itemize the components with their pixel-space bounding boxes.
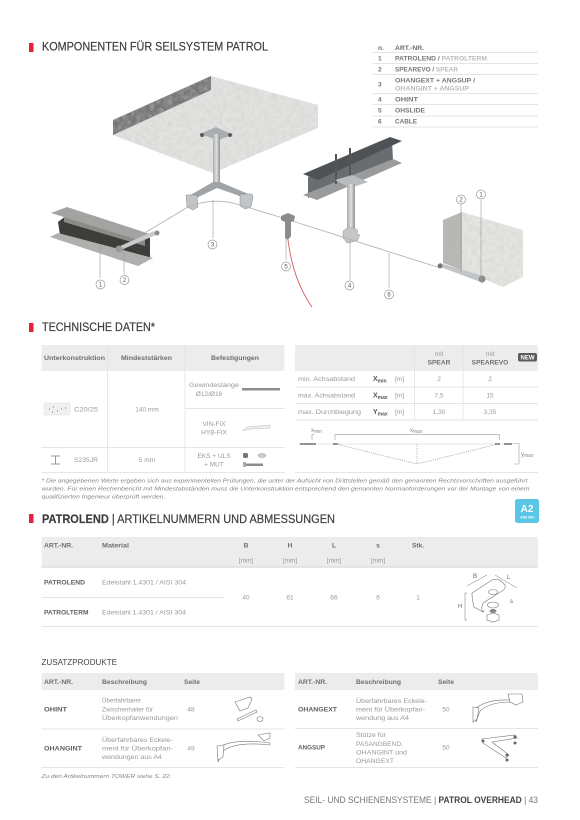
table: article list: OHSLIDE bbox=[395, 108, 426, 114]
table: accessories left: OHANGINT bbox=[44, 746, 82, 752]
table: accessories right: Stütze für bbox=[356, 732, 387, 739]
table: spacing values: mit bbox=[435, 351, 444, 358]
badge: A2 AISI 304 bbox=[515, 499, 539, 523]
table: spacing values: min bbox=[378, 378, 387, 384]
table: accessories left: Zwischenhalter für bbox=[102, 706, 154, 714]
diagram: cable deflection: max bbox=[413, 429, 423, 435]
icon: steel profile bbox=[51, 456, 60, 464]
table: article list: n. bbox=[378, 45, 384, 52]
table: accessories left: Überkopfanwendungen bbox=[102, 714, 178, 722]
table: accessories right: OHANGEXT bbox=[356, 758, 394, 765]
icon: OHANGINT bbox=[217, 733, 270, 762]
table: spacing values bbox=[295, 345, 538, 472]
table: spacing values: X bbox=[373, 376, 378, 383]
table: accessories right: OHANGINT und bbox=[356, 750, 407, 756]
table: article numbers and dimensions: Material bbox=[102, 542, 129, 550]
table: accessories left: Beschreibung bbox=[102, 679, 147, 686]
table: spacing values: 1,30 bbox=[433, 409, 446, 416]
table: article list: 3 bbox=[378, 82, 382, 88]
callout numbers: 4 bbox=[348, 284, 352, 290]
table: article numbers and dimensions: s bbox=[376, 542, 380, 550]
table: accessories right bbox=[295, 673, 538, 768]
table: article list: 6 bbox=[378, 118, 382, 126]
icon: fastener set bbox=[243, 453, 266, 467]
left end bracket bbox=[116, 230, 160, 252]
table: substructure and fastening: Mindeststärken bbox=[121, 355, 172, 362]
table: accessories right: wendung aus A4 bbox=[355, 715, 409, 722]
icon: ANGSUP bbox=[482, 735, 517, 762]
table: spacing values: max. Durchbiegung bbox=[298, 409, 361, 416]
heading: Patrolend: PATROLEND | ARTIKELNUMMERN UND ABMESSUNGEN bbox=[42, 514, 335, 526]
table: article numbers and dimensions: PATROLEND bbox=[44, 580, 85, 586]
icon: threaded rod bbox=[242, 388, 280, 390]
table: article list: PATROLEND / PATROLTERM bbox=[395, 56, 488, 62]
table: spacing values: [m] bbox=[395, 409, 404, 416]
table: article list: SPEAREVO / SPEAR bbox=[395, 66, 458, 74]
icon: concrete bbox=[44, 403, 70, 415]
table: article list bbox=[373, 45, 538, 127]
table: spacing values: 2 bbox=[437, 376, 441, 383]
table: article list: 1 bbox=[378, 56, 382, 62]
table: article list: OHANGEXT + ANGSUP / bbox=[395, 78, 475, 84]
table: accessories right: Seite bbox=[438, 679, 454, 686]
drawing: end bracket dimensions bbox=[458, 574, 517, 622]
wall concrete block bbox=[443, 212, 523, 287]
table: accessories right: ART.-NR. bbox=[298, 679, 327, 686]
callout numbers: 1 bbox=[99, 283, 103, 289]
table: accessories right: PASANGBEND, bbox=[356, 741, 403, 748]
table: spacing values: max bbox=[378, 395, 388, 401]
table: substructure and fastening: Ø12/Ø16 bbox=[196, 391, 223, 398]
table: spacing values: min. Achsabstand bbox=[298, 376, 355, 383]
table: article numbers and dimensions: L bbox=[332, 542, 336, 550]
table: article numbers and dimensions: [mm] bbox=[371, 558, 385, 564]
table: accessories left: Zu den Artikelnummern TOWER siehe S. 22. bbox=[40, 774, 171, 780]
table: article numbers and dimensions: [mm] bbox=[239, 558, 253, 564]
table: substructure and fastening: 5 mm bbox=[139, 457, 155, 464]
table: spacing values: SPEAREVO bbox=[472, 360, 508, 366]
footnote bbox=[42, 478, 530, 500]
table: article list: CABLE bbox=[395, 118, 418, 126]
diagram: cable deflection: y bbox=[521, 452, 524, 458]
callout numbers: 2 bbox=[123, 278, 127, 284]
table: accessories left: Überfahrbarer bbox=[102, 696, 142, 704]
table: article numbers and dimensions: B bbox=[244, 542, 249, 550]
table: article numbers and dimensions: 6 bbox=[376, 594, 380, 602]
red rope bbox=[288, 240, 312, 307]
table: spacing values: max bbox=[378, 412, 388, 418]
illustration: overhead cable system bbox=[50, 76, 523, 307]
left steel beam bbox=[50, 207, 153, 266]
table: accessories left: ment für Überkopfan- bbox=[102, 744, 173, 752]
table: article numbers and dimensions: 61 bbox=[286, 594, 294, 602]
table: spacing values: 15 bbox=[486, 392, 494, 400]
footnote: wurden. Für einen Rechenbericht mit Mindestabständen muss die Unterkonstruktion entsprechend den genannten Normanforderungen vor der Montage von einem bbox=[42, 486, 530, 492]
badge: new bbox=[518, 353, 537, 362]
drawing: end bracket dimensions: s bbox=[510, 599, 513, 605]
table: spacing values: 2 bbox=[488, 376, 492, 383]
heading: Komponenten: KOMPONENTEN FÜR SEILSYSTEM PATROL bbox=[42, 42, 269, 54]
diagram: cable deflection bbox=[298, 428, 534, 464]
table: article list: 2 bbox=[378, 66, 382, 74]
table: article list: ART.-NR. bbox=[395, 45, 424, 52]
badge: A2 AISI 304: A2 bbox=[521, 504, 534, 515]
table: accessories right: ment für Überkopfan- bbox=[356, 706, 425, 714]
drawing: end bracket dimensions: L bbox=[507, 575, 511, 581]
table: article list: 5 bbox=[378, 108, 382, 114]
table: accessories left: Seite bbox=[184, 679, 200, 686]
callout numbers: 6 bbox=[387, 293, 391, 299]
table: article numbers and dimensions: Edelstahl 1.4301 / AISI 304 bbox=[102, 580, 186, 586]
table: spacing values: max. Achsabstand bbox=[298, 392, 355, 400]
table: accessories left: OHINT bbox=[44, 706, 67, 714]
table: accessories left: 49 bbox=[187, 746, 195, 752]
table: article numbers and dimensions: [mm] bbox=[283, 558, 297, 564]
table: spacing values: X bbox=[373, 392, 378, 400]
table: article numbers and dimensions: Stk. bbox=[412, 542, 424, 550]
table: substructure and fastening: + MUT bbox=[204, 462, 224, 468]
table: article numbers and dimensions: Edelstahl 1.4301 / AISI 304 bbox=[102, 610, 186, 616]
badge: A2 AISI 304: AISI 304 bbox=[520, 516, 534, 520]
table: spacing values: [m] bbox=[395, 392, 404, 400]
table: substructure and fastening bbox=[42, 345, 285, 472]
table: substructure and fastening: Befestigungen bbox=[211, 355, 259, 362]
icon: OHANGEXT bbox=[473, 694, 523, 722]
ceiling bracket bbox=[186, 127, 253, 210]
diagram: cable deflection: min bbox=[314, 429, 322, 435]
table: article numbers and dimensions: 66 bbox=[330, 594, 338, 602]
table: substructure and fastening: EKS + ULS bbox=[197, 453, 231, 460]
table: accessories left: Überfahrbares Eckele- bbox=[102, 736, 173, 744]
heading: Technische Daten: TECHNISCHE DATEN* bbox=[42, 322, 155, 334]
table: spacing values: SPEAR bbox=[428, 360, 451, 366]
table: spacing values: [m] bbox=[395, 376, 404, 383]
table: article list: OHANGINT + ANGSUP bbox=[395, 86, 470, 92]
table: substructure and fastening: C20/25 bbox=[74, 406, 98, 414]
table: accessories right: ANGSUP bbox=[298, 744, 326, 752]
table: article numbers and dimensions: H bbox=[288, 542, 293, 550]
table: accessories left: wendungen aus A4 bbox=[101, 754, 162, 761]
table: substructure and fastening: S235JR bbox=[74, 457, 98, 464]
table: article list: OHINT bbox=[395, 96, 418, 104]
table: accessories right: Beschreibung bbox=[356, 679, 401, 686]
callout numbers: 1 bbox=[479, 193, 483, 199]
table: accessories right: 50 bbox=[442, 706, 450, 714]
table: article numbers and dimensions: PATROLTERM bbox=[44, 610, 88, 616]
table: accessories right: 50 bbox=[442, 744, 450, 752]
table: substructure and fastening: Unterkonstruktion bbox=[44, 355, 105, 362]
heading: Zusatzprodukte: ZUSATZPRODUKTE bbox=[42, 658, 117, 667]
footnote: qualifizierten Ingenieur überprüft werden. bbox=[42, 494, 166, 500]
table: substructure and fastening: HYB-FIX bbox=[201, 430, 227, 436]
table: article numbers and dimensions: 40 bbox=[242, 594, 250, 602]
icon: OHINT bbox=[235, 697, 263, 722]
icon: injection anchor bbox=[243, 425, 270, 431]
table: spacing values: 3,35 bbox=[484, 409, 497, 416]
table: substructure and fastening: 140 mm bbox=[135, 406, 159, 414]
concrete ceiling slab bbox=[113, 76, 318, 173]
footer: SEIL- UND SCHIENENSYSTEME | PATROL OVERHEAD | 43 bbox=[304, 795, 538, 805]
table: article numbers and dimensions: ART.-NR. bbox=[44, 542, 73, 550]
table: spacing values: mit bbox=[486, 351, 495, 358]
footnote: * Die angegebenen Werte ergeben sich aus experimentellen Prüfungen, die unter der Aufsicht von Drittstellen gemäß den genannten Rechtsvorschriften ausgeführt bbox=[42, 478, 528, 484]
right end bracket bbox=[438, 263, 486, 283]
table: article list: 4 bbox=[378, 96, 382, 104]
callout numbers: 2 bbox=[459, 198, 463, 204]
drawing: end bracket dimensions: H bbox=[458, 604, 462, 610]
table: article numbers and dimensions: [mm] bbox=[327, 558, 341, 564]
table: spacing values: 7,5 bbox=[434, 392, 444, 400]
table: accessories left bbox=[40, 673, 284, 780]
callout numbers: 5 bbox=[284, 265, 288, 271]
diagram: cable deflection: x bbox=[410, 428, 413, 434]
callout numbers: 3 bbox=[211, 243, 215, 249]
table: article numbers and dimensions: 1 bbox=[416, 594, 420, 602]
table: article numbers and dimensions bbox=[42, 537, 538, 626]
second steel beam with post bbox=[303, 137, 402, 243]
badge: new: NEW bbox=[520, 356, 535, 362]
slider bbox=[281, 213, 295, 240]
diagram: cable deflection: max bbox=[524, 453, 534, 459]
table: accessories left: 48 bbox=[187, 706, 195, 714]
cable bbox=[146, 201, 437, 267]
drawing: end bracket dimensions: B bbox=[473, 574, 477, 580]
callout numbers bbox=[96, 190, 486, 299]
table: accessories right: Überfahrbares Eckele- bbox=[356, 697, 427, 705]
table: substructure and fastening: VIN-FIX bbox=[202, 421, 226, 428]
table: accessories right: OHANGEXT bbox=[298, 706, 337, 714]
table: substructure and fastening: Gewindestange bbox=[189, 382, 239, 389]
table: accessories left: ART.-NR. bbox=[44, 679, 73, 686]
diagram: cable deflection: x bbox=[311, 428, 314, 434]
table: spacing values: Y bbox=[373, 409, 378, 416]
